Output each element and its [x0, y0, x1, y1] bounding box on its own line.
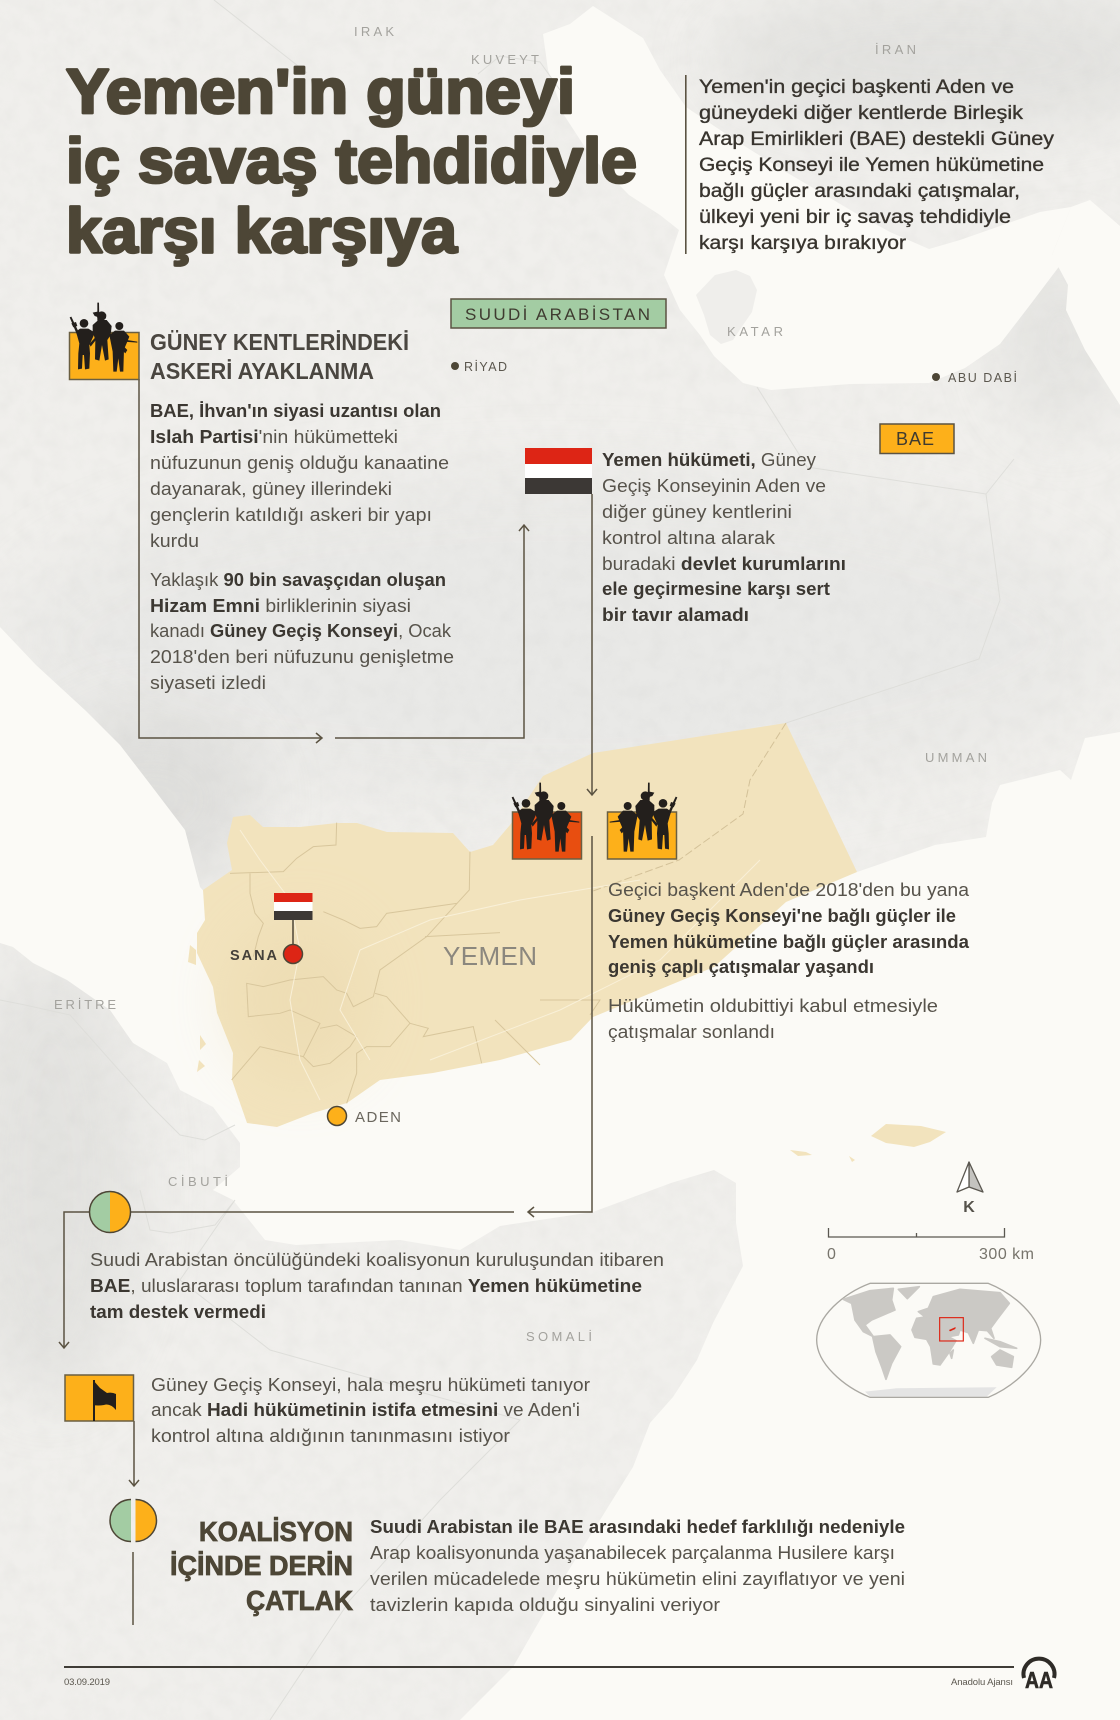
intro text: ülkeyi yeni bir iç savaş tehdidiyle — [699, 207, 1011, 228]
text block: clashes in Aden: Yemen hükümetine bağlı güçler arasında — [608, 932, 970, 952]
title: Yemen'in güneyi — [66, 57, 575, 127]
text block: clashes in Aden: çatışmalar sonlandı — [608, 1022, 775, 1042]
text block: Yemen government: bir tavır alamadı — [602, 605, 749, 625]
text block: Yemen government: ele geçirmesine karşı sert — [602, 579, 830, 599]
internal provinces — [230, 823, 500, 1103]
heading: deep crack within the coalition — [170, 1516, 353, 1616]
heading: southern uprising: GÜNEY KENTLERİNDEKİ — [150, 329, 409, 355]
text block: Islah: nüfuzunun geniş olduğu kanaatine — [150, 453, 449, 473]
map: Yemen — [188, 723, 946, 1162]
label: Suudi Arabistan: SUUDİ ARABİSTAN — [465, 305, 650, 324]
marker: Sana — [230, 893, 312, 964]
heading: southern uprising: ASKERİ AYAKLANMA — [150, 358, 374, 384]
text block: clashes in Aden: Hükümetin oldubittiyi kabul etmesiyle — [608, 996, 938, 1016]
text block: Yemen government: Geçiş Konseyinin Aden ve — [602, 476, 826, 496]
text block: Yemen government: buradaki devlet kurumlarını — [602, 554, 846, 574]
intro text: Yemen'in geçici başkenti Aden ve — [699, 77, 1014, 98]
heading: deep crack within the coalition: İÇİNDE DERİN — [170, 1550, 353, 1581]
footer: Anadolu Ajansı — [951, 1677, 1013, 1688]
label: BAE: BAE — [896, 429, 934, 449]
map labels: countries and cities: RİYAD — [464, 360, 507, 374]
text block: clashes in Aden: geniş çaplı çatışmalar yaşandı — [608, 957, 874, 977]
text block: coalition support — [90, 1250, 664, 1322]
connector lines — [59, 379, 597, 1625]
title — [66, 57, 637, 266]
intro text — [685, 75, 1055, 254]
scale bar: 0 — [827, 1246, 836, 1263]
text block: Hizam Emni: kanadı Güney Geçiş Konseyi, Ocak — [150, 621, 452, 641]
text block: clashes in Aden: Geçici başkent Aden'de 2018'den bu yana — [608, 880, 970, 900]
text block: Yemen government: diğer güney kentlerini — [602, 502, 792, 522]
text block: Transitional Council: kontrol altına aldığının tanınmasını istiyor — [151, 1426, 510, 1446]
text block: Transitional Council — [151, 1375, 590, 1446]
logo: AA — [1024, 1659, 1054, 1693]
map labels: countries and cities: İRAN — [875, 42, 916, 57]
map labels: countries and cities: KATAR — [727, 324, 783, 339]
text block: Hizam Emni: Yaklaşık 90 bin savaşçıdan oluşan — [150, 570, 446, 590]
land: Qatar — [696, 270, 757, 344]
map labels: countries and cities — [54, 24, 1017, 1344]
label: BAE — [880, 424, 954, 454]
text block: Transitional Council: Güney Geçiş Konseyi, hala meşru hükümeti tanıyor — [151, 1375, 590, 1395]
icon: Yemen flag — [525, 448, 592, 494]
text block: coalition fragmentation: Suudi Arabistan ile BAE arasındaki hedef farklılığı nedeniyle — [370, 1517, 905, 1537]
locator world map — [817, 1283, 1041, 1397]
text block: Islah: BAE, İhvan'ın siyasi uzantısı olan — [150, 401, 441, 421]
icon: soldiers on red box — [512, 783, 582, 859]
icon: coalition circle — [89, 1192, 130, 1232]
text block: Islah: Islah Partisi 'nin hükümetteki — [150, 427, 398, 447]
text block: Islah: gençlerin katıldığı askeri bir yapı — [150, 505, 432, 525]
text block: Transitional Council: ancak Hadi hükümetinin istifa etmesini ve Aden'i — [151, 1400, 580, 1420]
map labels: countries and cities: CİBUTİ — [168, 1174, 228, 1189]
text block: coalition support: tam destek vermedi — [90, 1302, 266, 1322]
text block: Yemen government — [602, 450, 846, 625]
map labels: countries and cities: YEMEN — [443, 941, 537, 971]
text block: coalition fragmentation: Arap koalisyonunda yaşanabilecek parçalanma Husilere karşı — [370, 1543, 895, 1563]
intro text: bağlı güçler arasındaki çatışmalar, — [699, 181, 1020, 202]
text block: Islah: dayanarak, güney illerindeki — [150, 479, 392, 499]
heading: southern uprising — [150, 329, 409, 384]
relief patches — [230, 920, 370, 1080]
icon: compass: K — [963, 1199, 975, 1216]
text block: coalition support: Suudi Arabistan öncülüğündeki koalisyonun kuruluşundan itibaren — [90, 1250, 664, 1270]
logo: AA: AA — [1025, 1667, 1053, 1693]
text block: clashes in Aden — [608, 880, 970, 1042]
map labels: countries and cities: KUVEYT — [471, 52, 539, 67]
icon: soldiers on orange box, mirrored — [608, 783, 677, 859]
heading: deep crack within the coalition: KOALİSYON — [199, 1516, 353, 1547]
text block: Islah: kurdu — [150, 531, 199, 551]
text block: Islah — [150, 401, 449, 551]
text block: coalition support: BAE, uluslararası toplum tarafından tanınan Yemen hükümetine — [90, 1276, 642, 1296]
text block: Yemen government: Yemen hükümeti, Güney — [602, 450, 816, 470]
map labels: countries and cities: UMMAN — [925, 750, 987, 765]
icon: black flag on orange box — [65, 1375, 134, 1421]
scale bar: 300 km — [979, 1246, 1034, 1263]
text block: Hizam Emni: 2018'den beri nüfuzunu genişletme — [150, 647, 454, 667]
text block: coalition fragmentation: verilen mücadelede meşru hükümetin elini zayıflatıyor ve yeni — [370, 1569, 905, 1589]
text block: Hizam Emni: siyaseti izledi — [150, 673, 266, 693]
marker: Aden: ADEN — [355, 1109, 401, 1126]
sea: Persian Gulf — [543, 6, 1071, 390]
icon: split coalition circle — [110, 1500, 156, 1542]
text block: Hizam Emni — [150, 570, 454, 693]
intro text: Geçiş Konseyi ile Yemen hükümetine — [699, 155, 1044, 176]
map labels: countries and cities: ERİTRE — [54, 997, 116, 1012]
title: karşı karşıya — [66, 196, 458, 266]
text block: coalition fragmentation: tavizlerin kapıda olduğu sinyalini veriyor — [370, 1595, 720, 1615]
icon: soldiers on orange box — [70, 303, 139, 380]
text block: Yemen government: kontrol altına alarak — [602, 528, 776, 548]
marker: Sana: SANA — [230, 948, 278, 964]
intro text: karşı karşıya bırakıyor — [699, 233, 907, 254]
heading: deep crack within the coalition: ÇATLAK — [246, 1585, 353, 1616]
text block: clashes in Aden: Güney Geçiş Konseyi'ne bağlı güçler ile — [608, 906, 956, 926]
footer — [64, 1666, 1014, 1688]
scale bar — [827, 1228, 1034, 1263]
text block: Hizam Emni: Hizam Emni birliklerinin siyasi — [150, 596, 411, 616]
intro text: güneydeki diğer kentlerde Birleşik — [699, 103, 1024, 124]
marker: Aden — [328, 1106, 401, 1126]
sea: Gulf of Oman, Arabian Sea, Gulf of Aden and Red Sea — [1052, 200, 1120, 405]
intro text: Arap Emirlikleri (BAE) destekli Güney — [699, 129, 1055, 150]
map labels: countries and cities: SOMALİ — [526, 1329, 592, 1344]
icon: compass — [957, 1162, 983, 1216]
text block: coalition fragmentation — [370, 1517, 905, 1615]
label: Suudi Arabistan — [451, 299, 666, 328]
map labels: countries and cities: ABU DABİ — [948, 371, 1017, 385]
map labels: countries and cities: IRAK — [354, 24, 394, 39]
footer: 03.09.2019 — [64, 1677, 110, 1688]
title: iç savaş tehdidiyle — [66, 126, 637, 196]
